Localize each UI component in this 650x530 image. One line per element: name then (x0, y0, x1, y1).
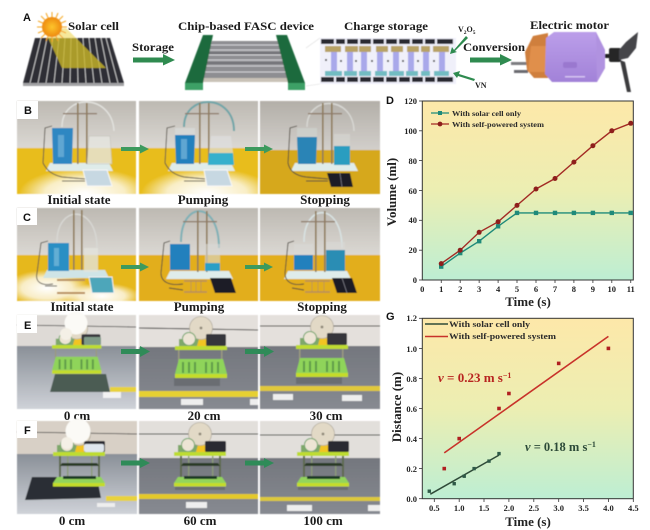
y tick labels G: 0.0 (406, 494, 417, 504)
label: panel letter E: E (24, 320, 31, 332)
y tick labels G: 1.2 (406, 313, 417, 323)
axis ticks D (419, 101, 631, 283)
diagram: charge storage electrodes (320, 38, 456, 84)
panel E: car with solar cell only (17, 312, 380, 423)
caption: C initial state: Initial state (50, 299, 114, 314)
annotation: green speed: v = 0.18 m s (525, 440, 587, 454)
arrow: B pumping to stopping (245, 144, 273, 154)
caption: E 30 cm: 30 cm (310, 408, 343, 423)
annotation: green speed: −1 (587, 440, 596, 449)
y tick labels G: 0.2 (406, 464, 417, 474)
label: V2O5: O (467, 25, 473, 34)
x tick labels D: 9 (591, 284, 595, 294)
photo: C initial state (5, 208, 140, 309)
label: panel letter C (17, 208, 37, 225)
y tick labels D: 80 (408, 156, 417, 166)
photo: B pumping (139, 101, 273, 218)
x tick labels G (429, 503, 639, 513)
x tick labels D: 1 (439, 284, 443, 294)
x tick labels G: 1.0 (454, 503, 465, 513)
y tick labels D: 0 (413, 275, 417, 285)
legend G: With solar cell only (449, 320, 530, 329)
legend D: With self-powered system (452, 120, 545, 129)
series: self-powered fit and points (442, 336, 610, 470)
label: panel letter B (17, 101, 38, 119)
x tick labels G: 2.0 (504, 503, 514, 513)
caption: C stopping: Stopping (297, 299, 347, 314)
caption: E 20 cm: 20 cm (188, 408, 221, 423)
icon: chip-based FASC device (185, 35, 320, 90)
annotation: red speed: v = 0.23 m s (438, 370, 503, 385)
arrow: F 60 to 100 cm (245, 458, 274, 468)
axis ticks G (419, 318, 633, 502)
caption: B stopping: Stopping (300, 192, 350, 207)
caption: E 0 cm: 0 cm (64, 408, 90, 423)
label: panel letter E (17, 315, 37, 333)
chart D: volume vs time (384, 95, 635, 309)
arrow: F 0 to 60 cm (121, 458, 150, 468)
caption: C pumping: Pumping (174, 299, 225, 314)
arrow: V2O5 pointer (450, 36, 468, 54)
label: panel letter G: G (386, 311, 395, 323)
panel B: pump with solar cell only (17, 101, 380, 218)
label: storage: Storage (132, 42, 174, 54)
y tick labels D: 60 (408, 186, 417, 196)
label: panel letter F (17, 421, 37, 438)
x tick labels D: 6 (534, 284, 538, 294)
series: solar cell only fit and points (428, 452, 501, 494)
y tick labels G: 0.6 (406, 404, 417, 414)
annotation: red speed: −1 (503, 371, 511, 380)
label: charge storage: Charge storage (344, 21, 428, 33)
photo: E 30 cm (260, 315, 380, 409)
y tick labels G: 1.0 (406, 344, 417, 354)
caption: B initial state: Initial state (47, 192, 111, 207)
label: electric motor: Electric motor (530, 20, 609, 32)
legend D: With solar cell only (452, 109, 521, 118)
photo: E 20 cm (139, 315, 258, 409)
label: panel letter A: A (23, 12, 31, 24)
y tick labels G (406, 313, 418, 504)
series: with solar cell only (439, 211, 633, 269)
plot area D (422, 101, 633, 280)
y axis title G: Distance (m) (389, 372, 404, 442)
arrow: B initial to pumping (121, 144, 149, 154)
photo: C pumping (139, 208, 258, 301)
y tick labels D (404, 96, 417, 285)
x axis title D: Time (s) (505, 294, 551, 309)
x tick labels D: 7 (553, 284, 558, 294)
label: panel letter D: D (386, 95, 394, 107)
caption: F 60 cm: 60 cm (184, 513, 217, 528)
caption: F 0 cm: 0 cm (59, 513, 85, 528)
x tick labels D: 10 (608, 284, 616, 294)
y tick labels G: 0.8 (406, 374, 417, 384)
y axis title D: Volume (ml) (384, 158, 399, 226)
chart G: distance vs time (386, 311, 639, 529)
photo: B initial state (17, 101, 151, 218)
label: panel letter C: C (23, 212, 31, 224)
x tick labels D: 4 (496, 284, 501, 294)
x tick labels D: 2 (458, 284, 462, 294)
arrow: storage (133, 54, 175, 66)
plot area G (422, 318, 633, 499)
caption: F 100 cm: 100 cm (303, 513, 343, 528)
panel A: solar-to-motor workflow (23, 12, 638, 92)
label: V2O5: V (458, 25, 464, 34)
legend G (425, 320, 556, 341)
y tick labels D: 20 (408, 245, 417, 255)
label: V2O5: 2 (464, 30, 467, 36)
icon: solar panel with sun (23, 12, 124, 86)
arrow: C pumping to stopping (245, 262, 273, 272)
arrow: C initial to pumping (121, 262, 149, 272)
x axis title G: Time (s) (505, 514, 551, 529)
label: solar cell: Solar cell (68, 21, 119, 33)
caption: B pumping: Pumping (178, 192, 229, 207)
y tick labels D: 40 (408, 215, 417, 225)
photo: F 0 cm (17, 418, 137, 514)
photo: E 0 cm (17, 312, 136, 409)
x tick labels G: 2.5 (528, 503, 539, 513)
label: panel letter B: B (24, 105, 32, 117)
x tick labels G: 4.5 (628, 503, 639, 513)
x tick labels G: 3.5 (578, 503, 589, 513)
photo: B stopping (260, 101, 380, 194)
label: V2O5: 5 (473, 30, 476, 36)
panel F: car with self-powered system (17, 418, 380, 528)
x tick labels G: 3.0 (553, 503, 564, 513)
y tick labels D: 120 (404, 96, 417, 106)
panel C: pump with self-powered system (5, 208, 380, 314)
y tick labels G: 0.4 (406, 434, 418, 444)
label: panel letter F: F (24, 425, 31, 437)
x tick labels D: 3 (477, 284, 481, 294)
label: VN: VN (475, 81, 487, 90)
photo: C stopping (260, 208, 380, 301)
x tick labels D: 5 (515, 284, 519, 294)
x tick labels G: 1.5 (479, 503, 489, 513)
photo: F 100 cm (260, 421, 380, 514)
x tick labels D: 8 (572, 284, 576, 294)
legend G: With self-powered system (449, 332, 556, 341)
legend D (431, 109, 545, 129)
series: with self-powered system (439, 121, 633, 266)
photo: F 60 cm (139, 421, 258, 514)
icon: electric motor with propeller (511, 32, 638, 92)
arrow: E 0 to 20 cm (121, 346, 150, 357)
y tick labels D: 100 (404, 126, 417, 136)
x tick labels G: 0.5 (429, 503, 440, 513)
label: conversion: Conversion (463, 42, 526, 54)
x tick labels G: 4.0 (603, 503, 614, 513)
arrow: E 20 to 30 cm (245, 346, 274, 357)
label: chip device: Chip-based FASC device (178, 21, 314, 33)
x tick labels D: 11 (627, 284, 635, 294)
arrow: VN pointer (453, 71, 475, 81)
arrow: conversion (470, 54, 512, 66)
x tick labels D: 0 (420, 284, 424, 294)
x tick labels D (420, 284, 635, 294)
